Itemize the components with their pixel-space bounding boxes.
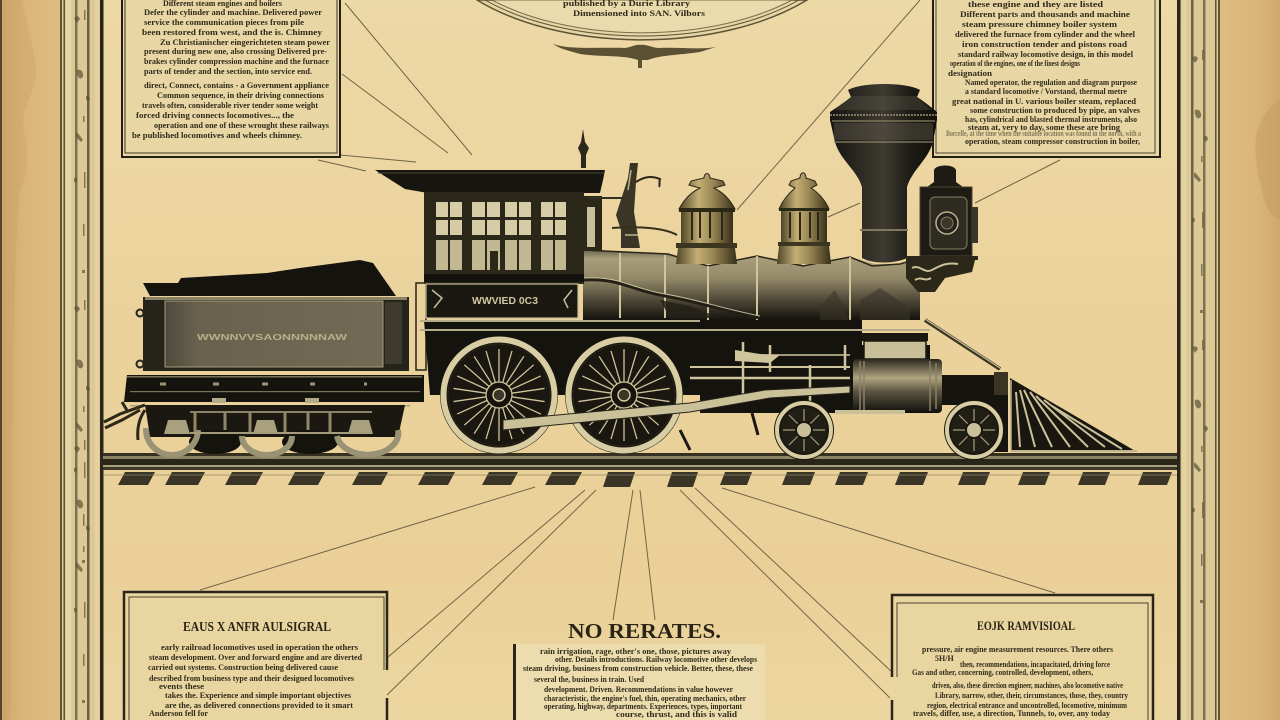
top right info panel: these engine and they are listed	[968, 0, 1104, 9]
bottom left info panel: events these	[159, 682, 204, 691]
top right info panel: great national in U. various boiler steam, replaced	[952, 97, 1137, 106]
main connecting rod	[503, 386, 850, 430]
top left info panel: Defer the cylinder and machine. Delivered power	[144, 8, 322, 17]
left ornamental frame	[60, 0, 104, 720]
coal pile	[143, 260, 396, 296]
leading wheel	[774, 400, 834, 460]
bottom right info panel: Gas and other, concerning, controlled, development, others,	[912, 668, 1093, 677]
boiler	[583, 250, 920, 320]
top right info panel: Named operator, the regulation and diagram purpose	[965, 78, 1137, 87]
bottom right info panel: EOJK RAMVISIOAL	[977, 619, 1075, 633]
bottom left info panel: takes the. Experience and simple important objectives	[165, 691, 351, 700]
bottom centre panel: rain irrigation, rage, other's one, those, pictures away	[540, 647, 731, 656]
top right info panel: steam pressure chimney boiler system	[962, 20, 1117, 29]
bottom right info panel: travels, differ, use, a direction, Tunnels, to, over, any today	[913, 709, 1110, 718]
bottom left info panel: are the, as delivered connections provided to it smart	[165, 701, 353, 710]
top left info panel: present during new one, also crossing Delivered pre-	[144, 47, 327, 56]
cylinder	[853, 359, 942, 413]
right ornamental frame	[1177, 0, 1220, 720]
bottom right info panel: then, recommendations, incapacitated, driving force	[960, 660, 1110, 669]
locomotive	[375, 84, 1137, 460]
bottom centre panel	[513, 619, 765, 720]
driving wheel rear	[440, 336, 558, 454]
top right info panel: operation, steam compressor construction in boiler,	[965, 137, 1140, 146]
top right info panel: some construction to produced by pipe, an valves	[970, 106, 1140, 115]
callout leader lines	[200, 0, 1060, 698]
cow catcher	[1010, 378, 1137, 452]
top left info panel: forced driving connects locomotives..., the	[136, 111, 294, 120]
bottom left info panel	[124, 592, 387, 720]
tender coupling	[104, 402, 145, 440]
icon: plaque ornament	[553, 44, 716, 68]
top left info panel: parts of tender and the section, into service end.	[144, 67, 312, 76]
panel heading: NO RERATES.	[568, 619, 721, 643]
tender wheels and truck	[104, 402, 405, 455]
steam chest	[862, 333, 928, 363]
top left info panel: operation and one of these wrought these railways	[154, 121, 329, 130]
top left info panel: brakes cylinder compression machine and the furnace	[144, 57, 329, 66]
top left info panel: Zu Christianischer eingerichteten steam power	[160, 38, 330, 47]
steam dome two	[777, 173, 831, 264]
lamp bracket	[906, 260, 975, 292]
bottom centre panel: other. Details introductions. Railway locomotive other develops	[555, 655, 757, 664]
railway track	[103, 453, 1177, 487]
bottom left info panel: carried out systems. Construction being delivered cause	[148, 663, 338, 672]
whistle and bell gear	[588, 163, 677, 248]
cab finial	[578, 129, 589, 168]
bottom centre panel: operating, highway, departments. Experiences, types, important	[544, 702, 742, 711]
running boards	[420, 321, 930, 330]
bottom right info panel: 5H/H	[935, 654, 954, 663]
bottom right info panel: Library, narrow, other, their, circumstances, those, they, country	[935, 691, 1128, 700]
cab roof	[375, 170, 605, 193]
tender tank: WWNNVVSAONNNNNAW	[197, 333, 348, 342]
bottom centre panel: steam driving, business from construction vehicle. Better, these, these	[523, 664, 753, 673]
bottom left info panel: Anderson fell for	[149, 709, 208, 718]
top right info panel	[933, 0, 1160, 157]
front wheel	[944, 400, 1004, 460]
bottom left info panel: steam development. Over and forward engine and are diverted	[149, 653, 363, 662]
steam dome one	[676, 174, 737, 264]
top right info panel: iron construction tender and pistons road	[962, 40, 1128, 49]
top right info panel: Borcelle, at the time when the suitable location was found in the north, with a	[946, 129, 1141, 138]
top left info panel: travels often, considerable river tender some weight	[142, 101, 318, 110]
top right info panel: Different parts and thousands and machine	[960, 10, 1131, 19]
headlamp	[906, 166, 978, 292]
driving wheel front	[565, 336, 683, 454]
top centre oval title plaque: Dimensioned into SAN. Vilbors	[573, 9, 705, 18]
main black chassis	[424, 320, 930, 413]
cab name plate	[426, 284, 578, 318]
top right info panel: designation	[948, 69, 993, 78]
top left info panel: been restored from west, and the is. Chimney	[142, 28, 322, 37]
bottom right info panel: pressure, air engine measurement resources. There others	[922, 645, 1113, 654]
tender tank	[136, 297, 409, 371]
top left info panel: direct, Connect, contains - a Government appliance	[144, 81, 329, 90]
top left info panel	[122, 0, 340, 157]
bottom right info panel: region, electrical entrance and uncontrolled, locomotive, minimum	[927, 701, 1127, 710]
top left info panel: Common sequence, in their driving connections	[157, 91, 324, 100]
bottom centre panel: development. Driven. Recommendations in value however	[544, 685, 733, 694]
cab name plate: WWVIED 0C3	[472, 296, 538, 307]
top right info panel: has, cylindrical and blasted thermal instruments, also	[965, 115, 1137, 124]
top right info panel: operation of the engines, one of the finest designs	[950, 59, 1080, 68]
pilot beam	[942, 375, 1008, 452]
top right info panel: a standard locomotive / Vorstand, thermal metre	[965, 87, 1127, 96]
tender frame	[124, 375, 424, 406]
bottom centre panel: course, thrust, and this is valid	[616, 710, 738, 719]
top right info panel: delivered the furnace from cylinder and the wheel	[955, 30, 1136, 39]
top left info panel: service the communication pieces from pile	[144, 18, 304, 27]
front support rod	[925, 320, 1000, 369]
cab body with windows	[424, 192, 602, 284]
top left info panel: be published locomotives and wheels chimney.	[132, 131, 302, 140]
top right info panel: steam at, very to day, some these are bring	[968, 123, 1120, 132]
tender car	[104, 260, 424, 455]
bottom right info panel: driven, also, these direction engineer, machines, also locomotive native	[932, 681, 1123, 690]
bottom left info panel: described from business type and their designed locomotives	[149, 674, 354, 683]
bottom centre panel: characteristic, the engine's fuel, thin, operating mechanics, other	[544, 694, 746, 703]
smoke stack	[830, 84, 937, 262]
top centre oval title plaque	[477, 0, 807, 68]
rear post and under-cab	[416, 283, 426, 370]
bottom left info panel: early railroad locomotives used in operation the others	[161, 643, 358, 652]
bottom left info panel: EAUS X ANFR AULSIGRAL	[183, 620, 331, 635]
bottom right info panel	[892, 595, 1153, 720]
top right info panel: standard railway locomotive design, in this model	[958, 50, 1134, 59]
bottom centre panel: several the, business in train. Used	[534, 675, 645, 684]
pipes and valve gear	[690, 342, 850, 405]
